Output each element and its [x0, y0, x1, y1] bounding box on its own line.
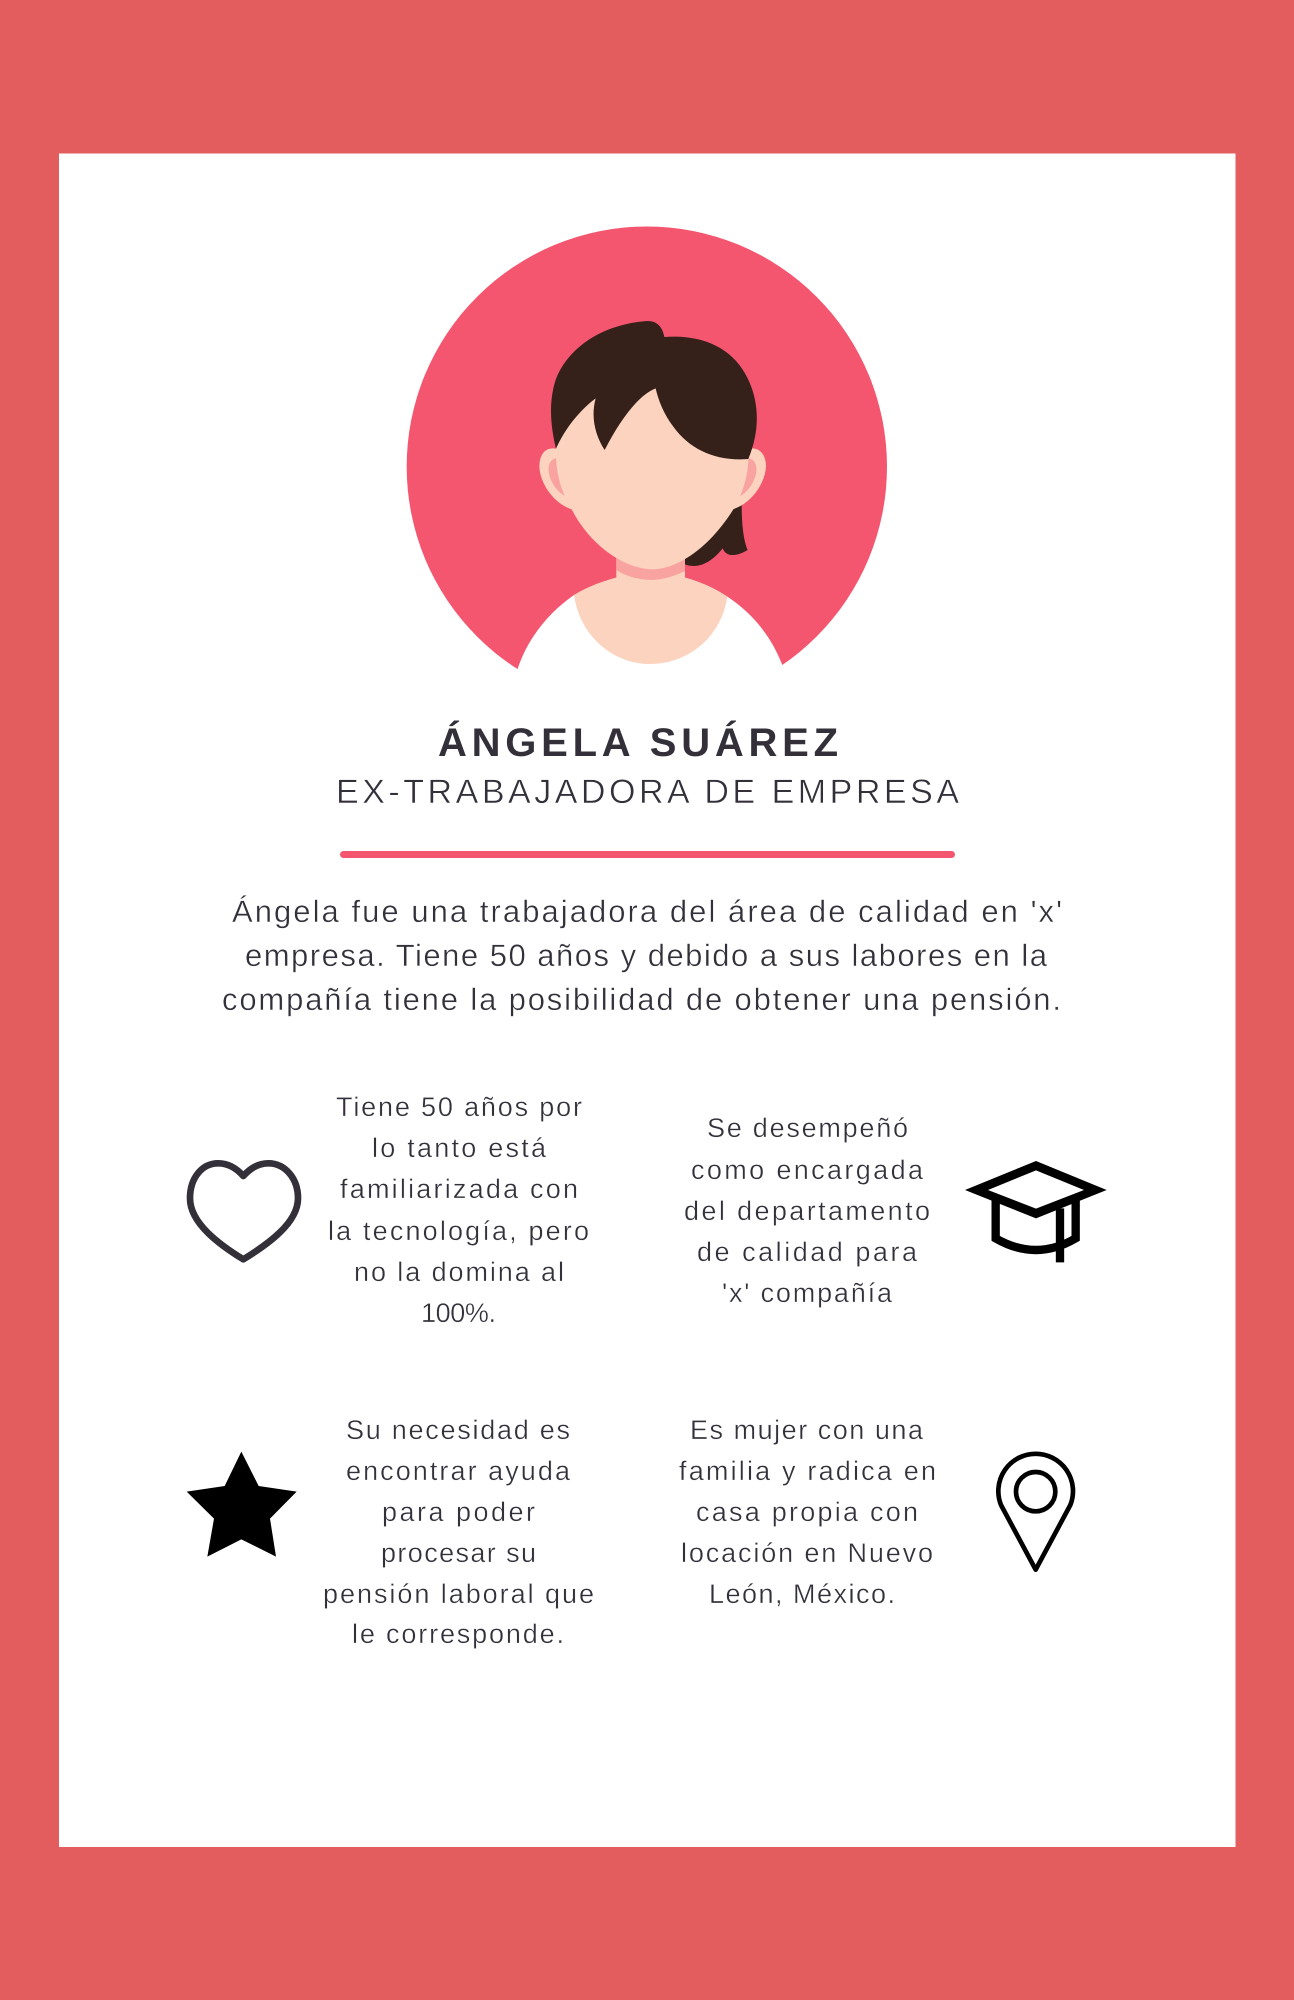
- icon: star: [187, 1452, 297, 1557]
- icon: heart: [190, 1163, 298, 1259]
- portrait: left ear: [539, 448, 580, 509]
- text block: age: [328, 1092, 589, 1328]
- text block: job: [684, 1113, 930, 1308]
- text block: job: de calidad para: [697, 1237, 918, 1267]
- portrait: right ear: [727, 448, 766, 509]
- intro paragraph: [222, 894, 1062, 1017]
- text block: age: la tecnología, pero: [328, 1216, 589, 1246]
- portrait: white shirt: [518, 578, 782, 720]
- intro paragraph: Ángela fue una trabajadora del área de calidad en 'x': [232, 894, 1062, 929]
- text block: need: le corresponde.: [352, 1619, 564, 1649]
- text block: age: 100%.: [421, 1298, 496, 1328]
- portrait: front hair: [551, 321, 757, 459]
- text block: family and location: León, México.: [709, 1579, 895, 1609]
- divider bar: [340, 851, 955, 858]
- text block: family and location: casa propia con: [696, 1497, 918, 1527]
- title: name: ÁNGELA SUÁREZ: [438, 720, 838, 765]
- text block: job: del departamento: [684, 1196, 930, 1226]
- text block: job: como encargada: [691, 1155, 924, 1185]
- text block: need: [323, 1415, 594, 1649]
- panel: white card: [59, 154, 1236, 1847]
- text block: need: encontrar ayuda: [346, 1456, 571, 1486]
- intro paragraph: compañía tiene la posibilidad de obtener una pensión.: [222, 982, 1061, 1017]
- text block: need: Su necesidad es: [346, 1415, 570, 1445]
- portrait: back hair: [685, 503, 748, 566]
- text block: job: Se desempeñó: [707, 1113, 908, 1143]
- portrait: neck and chest: [574, 557, 727, 664]
- intro paragraph: empresa. Tiene 50 años y debido a sus labores en la: [245, 938, 1048, 973]
- text block: need: para poder: [382, 1497, 535, 1527]
- text block: age: lo tanto está: [372, 1133, 547, 1163]
- text block: family and location: Es mujer con una: [690, 1415, 924, 1445]
- text block: age: familiarizada con: [340, 1174, 578, 1204]
- text block: family and location: [679, 1415, 936, 1609]
- icon: location pin: [998, 1454, 1073, 1570]
- text block: need: procesar su: [381, 1538, 536, 1568]
- text block: age: Tiene 50 años por: [336, 1092, 582, 1122]
- text block: job: 'x' compañía: [722, 1278, 893, 1308]
- text block: family and location: locación en Nuevo: [681, 1538, 933, 1568]
- text block: age: no la domina al: [354, 1257, 564, 1287]
- text block: need: pensión laboral que: [323, 1579, 594, 1609]
- text block: family and location: familia y radica en: [679, 1456, 936, 1486]
- subtitle: EX-TRABAJADORA DE EMPRESA: [336, 773, 959, 811]
- portrait: neck shadow: [616, 557, 685, 580]
- portrait: pink circle: [407, 226, 887, 707]
- icon: graduation cap: [965, 1161, 1107, 1262]
- portrait: face: [556, 377, 748, 569]
- portrait illustration: [407, 226, 887, 720]
